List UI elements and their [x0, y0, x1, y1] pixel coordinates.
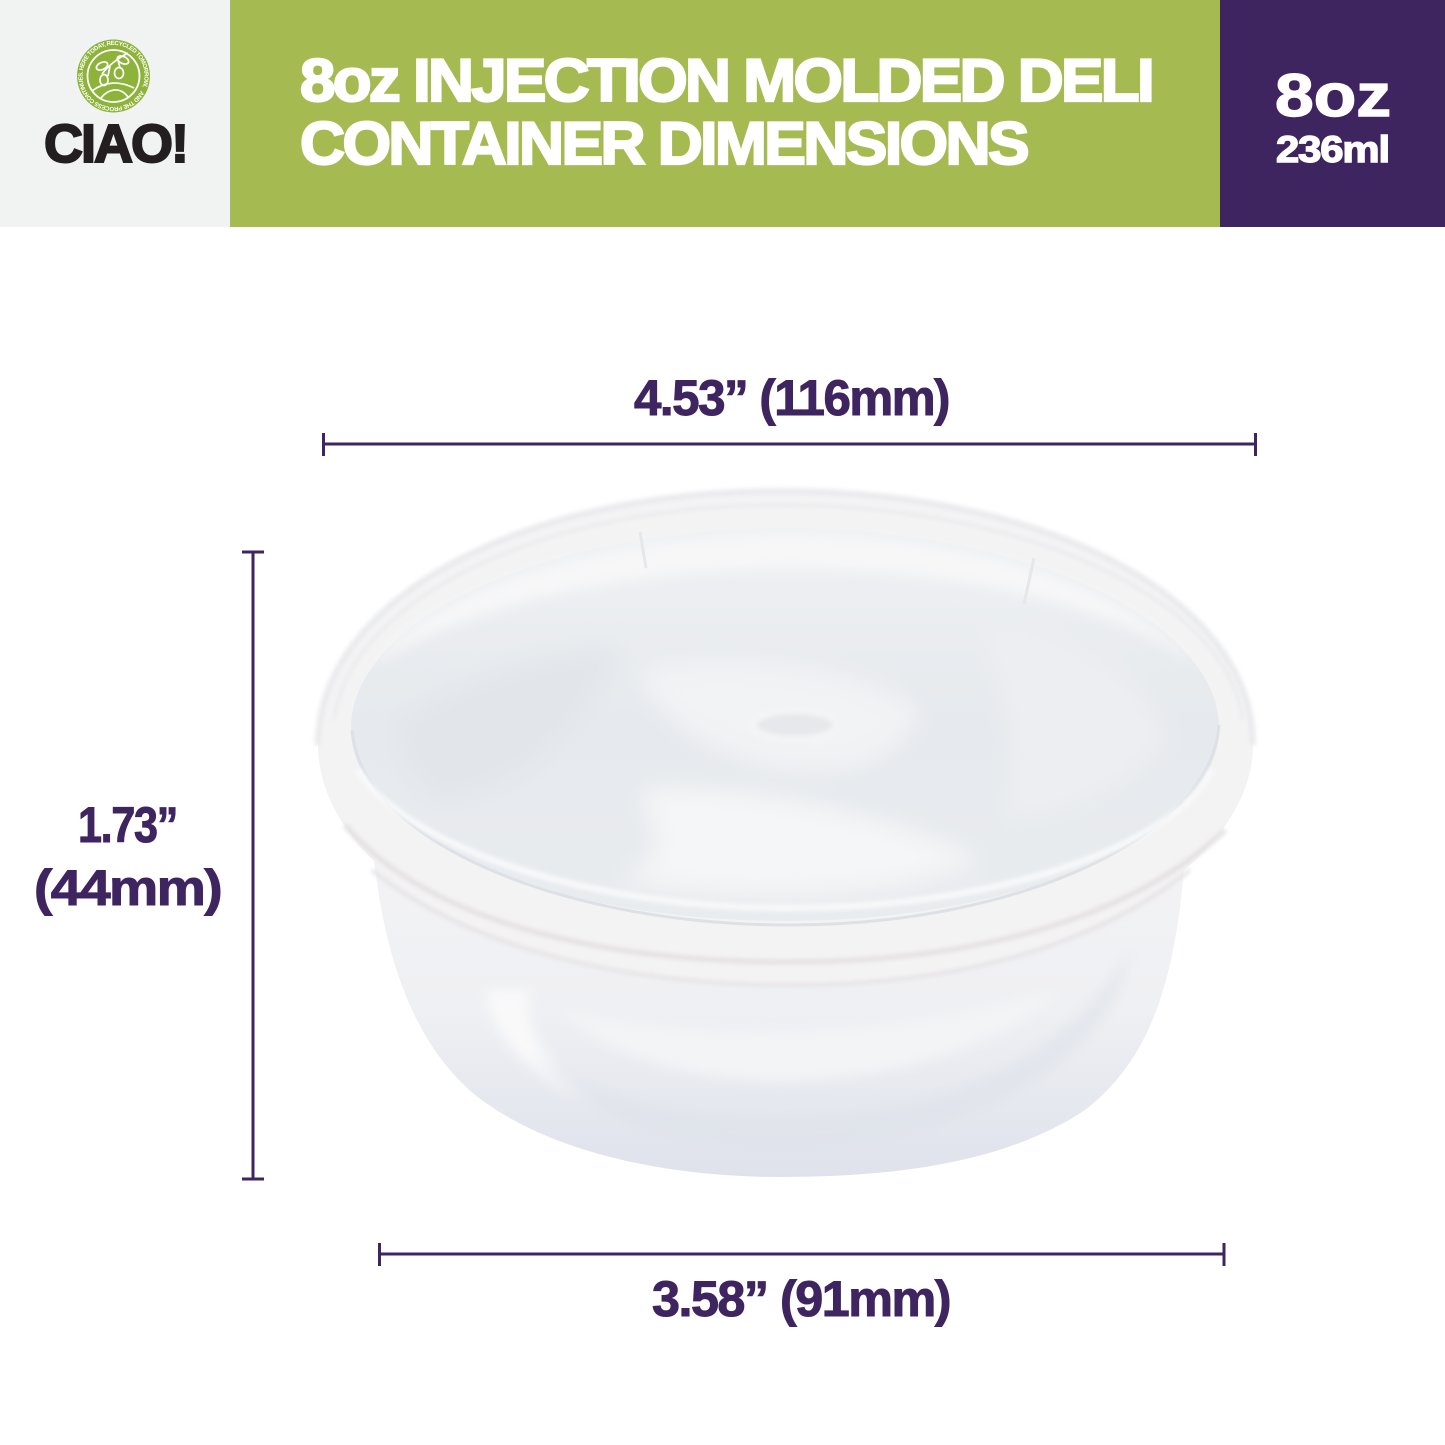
lid outer edge shading	[318, 491, 1253, 745]
heading: title: CONTAINER DIMENSIONS	[300, 110, 1027, 177]
heading: title: 8oz INJECTION MOLDED DELI	[300, 47, 1152, 114]
panel: title band	[230, 0, 1220, 227]
bottom width label: 3.58” (91mm)	[652, 1271, 950, 1327]
height line	[242, 552, 264, 1179]
band shadow lines	[345, 825, 1225, 962]
lid inner rim edge	[352, 725, 1219, 925]
dimension: height	[34, 552, 264, 1179]
lid notches	[640, 532, 1034, 604]
lid top rim	[334, 505, 1243, 720]
heading: title	[300, 47, 1152, 177]
height label: (44mm)	[34, 860, 221, 916]
capacity text: 8oz	[1275, 62, 1391, 129]
lid white inner highlight	[358, 770, 1212, 908]
height label: 1.73”	[78, 797, 177, 853]
lid upper ledge	[375, 535, 1195, 665]
dimension: bottom width	[380, 1243, 1224, 1327]
logo wordmark: CIAO!	[44, 114, 187, 174]
icon: circular olive branch badge: AND THE PROCESS CONTINUES. HERE TODAY, RECYCLED TOMORROW,	[78, 40, 149, 112]
lid outer band	[318, 491, 1253, 985]
bottom width line	[380, 1243, 1224, 1266]
panel: capacity badge	[1220, 0, 1445, 227]
container body	[372, 840, 1186, 1177]
lid inner disc	[351, 528, 1219, 921]
lid surface reflections	[399, 620, 1170, 894]
inner cup reflections	[486, 950, 1130, 1150]
height label	[34, 797, 221, 916]
top width label: 4.53” (116mm)	[634, 370, 949, 426]
top width line	[324, 433, 1256, 456]
dimension: top width	[324, 370, 1256, 456]
product image: translucent deli container	[318, 491, 1253, 1177]
panel: logo background	[0, 0, 230, 227]
capacity text: 236ml	[1276, 129, 1389, 170]
capacity text	[1275, 62, 1391, 170]
center gate mark	[753, 710, 837, 740]
